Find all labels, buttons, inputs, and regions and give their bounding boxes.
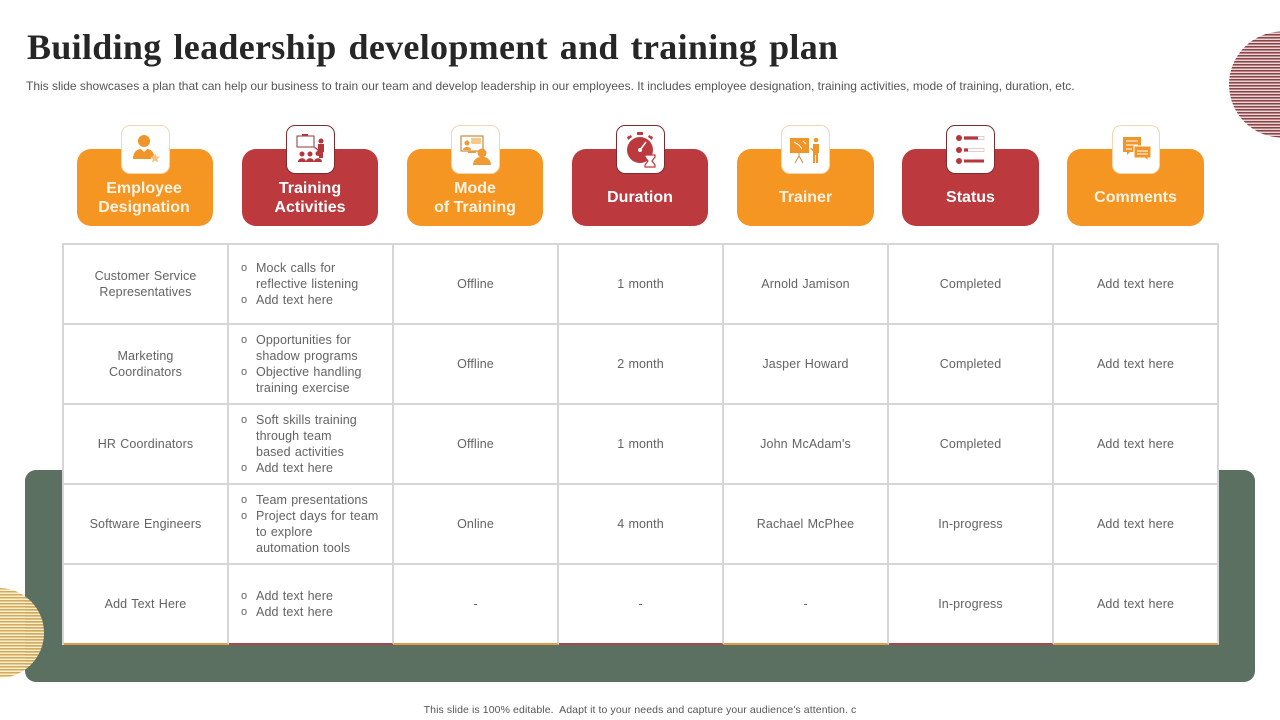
header: Training Activities: Training bbox=[279, 180, 341, 197]
row 1: o bbox=[241, 294, 247, 306]
row 1: Arnold Jamison bbox=[761, 277, 850, 291]
row 5: Add Text Here bbox=[105, 597, 186, 611]
header: Status bbox=[902, 149, 1039, 226]
header: Trainer bbox=[737, 149, 874, 226]
row 4: 4 month bbox=[617, 517, 664, 531]
row 3 bbox=[64, 405, 1219, 485]
row 2: Coordinators bbox=[109, 365, 182, 379]
row 4: In-progress bbox=[938, 517, 1003, 531]
row 2: training exercise bbox=[256, 381, 350, 395]
row 5: - bbox=[638, 597, 643, 611]
row 2: Marketing bbox=[118, 349, 173, 363]
row 3: John McAdam's bbox=[760, 437, 851, 451]
row 2: o bbox=[241, 334, 247, 346]
row 5 bbox=[64, 565, 1219, 645]
header: Training Activities: Activities bbox=[274, 199, 346, 216]
header: Comments: Comments bbox=[1094, 189, 1177, 206]
row 2: Objective handling bbox=[256, 365, 362, 379]
header: Employee Designation bbox=[77, 149, 213, 226]
row 5: - bbox=[803, 597, 808, 611]
row 4: Add text here bbox=[1097, 517, 1174, 531]
header: Comments bbox=[1067, 149, 1204, 226]
row 2 bbox=[64, 325, 1219, 405]
row 4 bbox=[64, 485, 1219, 565]
row 1: o bbox=[241, 262, 247, 274]
icon: employee with star bbox=[121, 125, 170, 174]
row 3: 1 month bbox=[617, 437, 664, 451]
row 3: through team bbox=[256, 429, 332, 443]
row 2: Add text here bbox=[1097, 357, 1174, 371]
icon: trainer presenting to audience bbox=[286, 125, 335, 174]
row 3: Offline bbox=[457, 437, 494, 451]
row 2: 2 month bbox=[617, 357, 664, 371]
subtitle: This slide showcases a plan that can help our business to train our team and develop leadership in our employees. It includes employee designation, training activities, mode of training, duration, etc. bbox=[26, 79, 1075, 93]
row 4: Project days for team bbox=[256, 509, 378, 523]
row 4: Rachael McPhee bbox=[757, 517, 854, 531]
row 2: Jasper Howard bbox=[762, 357, 849, 371]
row 4: o bbox=[241, 494, 247, 506]
row 3: Add text here bbox=[1097, 437, 1174, 451]
icon: status checklist bbox=[946, 125, 995, 174]
header: Duration bbox=[572, 149, 708, 226]
row 3: o bbox=[241, 414, 247, 426]
decorative circle: bottom left striped bbox=[0, 588, 44, 678]
header: Mode of Training bbox=[407, 149, 543, 226]
header: Status: Status bbox=[946, 189, 995, 206]
row 2: o bbox=[241, 366, 247, 378]
row 4: to explore bbox=[256, 525, 313, 539]
row 3: Soft skills training bbox=[256, 413, 357, 427]
row 1: Customer Service bbox=[95, 269, 196, 283]
header: Employee Designation: Employee bbox=[106, 180, 182, 197]
header: Mode of Training: Mode bbox=[454, 180, 496, 197]
row 5: o bbox=[241, 590, 247, 602]
title: Building leadership development and training plan bbox=[27, 27, 838, 67]
row 1: reflective listening bbox=[256, 277, 358, 291]
icon: online session bbox=[451, 125, 500, 174]
row 3: HR Coordinators bbox=[98, 437, 193, 451]
row 4: Software Engineers bbox=[90, 517, 201, 531]
data table bbox=[62, 243, 1219, 645]
row 1 bbox=[64, 245, 1219, 325]
row 1: Representatives bbox=[99, 285, 192, 299]
row 3: Completed bbox=[940, 437, 1001, 451]
row 2: Completed bbox=[940, 357, 1001, 371]
row 1: Add text here bbox=[1097, 277, 1174, 291]
row 2: Offline bbox=[457, 357, 494, 371]
row 2: shadow programs bbox=[256, 349, 358, 363]
row 3: Add text here bbox=[256, 461, 333, 475]
row 4: Online bbox=[457, 517, 494, 531]
row 5: In-progress bbox=[938, 597, 1003, 611]
row 4: Team presentations bbox=[256, 493, 368, 507]
row 3: o bbox=[241, 462, 247, 474]
icon: stopwatch and hourglass bbox=[616, 125, 665, 174]
header: Employee Designation: Designation bbox=[98, 199, 190, 216]
row 5: - bbox=[473, 597, 478, 611]
row 5: Add text here bbox=[1097, 597, 1174, 611]
header: Training Activities bbox=[242, 149, 378, 226]
row 2: Opportunities for bbox=[256, 333, 351, 347]
row 1: Completed bbox=[940, 277, 1001, 291]
row 5: o bbox=[241, 606, 247, 618]
row 4: automation tools bbox=[256, 541, 350, 555]
row 1: Mock calls for bbox=[256, 261, 335, 275]
footer note: This slide is 100% editable. Adapt it to your needs and capture your audience's attention. c bbox=[424, 704, 856, 716]
header: Trainer: Trainer bbox=[779, 189, 832, 206]
row 1: 1 month bbox=[617, 277, 664, 291]
row 1: Add text here bbox=[256, 293, 333, 307]
row 4: o bbox=[241, 510, 247, 522]
decorative circle: top right striped bbox=[1229, 32, 1280, 138]
row 5: Add text here bbox=[256, 589, 333, 603]
icon: trainer at board bbox=[781, 125, 830, 174]
row 1: Offline bbox=[457, 277, 494, 291]
header: Duration: Duration bbox=[607, 189, 673, 206]
green background panel bbox=[25, 470, 1255, 682]
row 3: based activities bbox=[256, 445, 344, 459]
icon: comment bubbles bbox=[1112, 125, 1160, 174]
header: Mode of Training: of Training bbox=[434, 199, 516, 216]
row 5: Add text here bbox=[256, 605, 333, 619]
